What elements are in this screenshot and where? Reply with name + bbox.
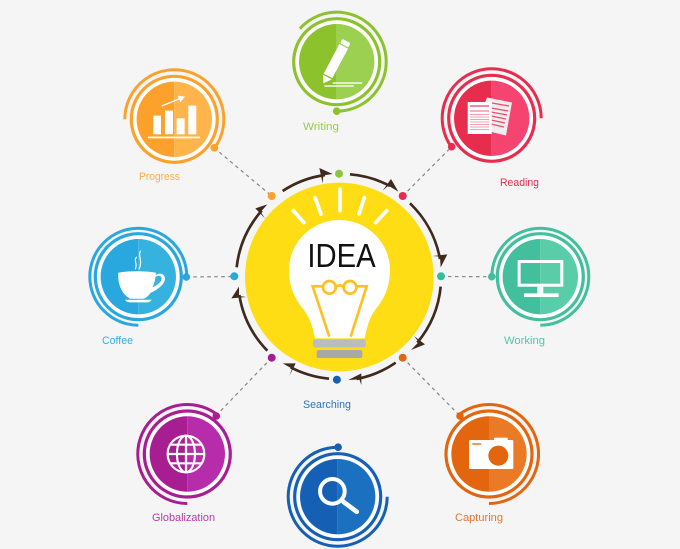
- icon: light bulb: [289, 189, 390, 358]
- icon: magnifier: [320, 479, 357, 512]
- node: writing: [294, 12, 386, 133]
- label: progress: Progress: [139, 171, 180, 183]
- node: reading: [442, 69, 541, 189]
- icon: pencil: [323, 39, 362, 87]
- node: working: [488, 228, 589, 347]
- node: searching: [288, 399, 387, 546]
- central idea hub: [231, 168, 447, 385]
- label: writing: Writing: [303, 121, 339, 133]
- icon: coffee cup: [118, 251, 165, 302]
- label: globalization: Globalization: [152, 512, 215, 524]
- node: progress: [125, 70, 224, 183]
- icon: bar chart: [148, 96, 200, 138]
- icon: monitor: [519, 262, 562, 297]
- cycle arrows: [231, 168, 447, 385]
- label: working: Working: [504, 335, 545, 347]
- node: capturing: [446, 404, 539, 524]
- label: reading: Reading: [500, 177, 539, 189]
- hub dots: [230, 170, 445, 384]
- icon: documents: [468, 98, 512, 136]
- icon: globe: [168, 436, 204, 472]
- IDEA label: IDEA: [307, 237, 376, 274]
- label: searching: Searching: [303, 399, 351, 411]
- label: coffee: Coffee: [102, 335, 133, 347]
- node: globalization: [138, 404, 230, 524]
- yellow circle: [245, 183, 434, 371]
- label: capturing: Capturing: [455, 512, 503, 524]
- icon: camera: [469, 438, 513, 469]
- node: coffee: [90, 228, 190, 347]
